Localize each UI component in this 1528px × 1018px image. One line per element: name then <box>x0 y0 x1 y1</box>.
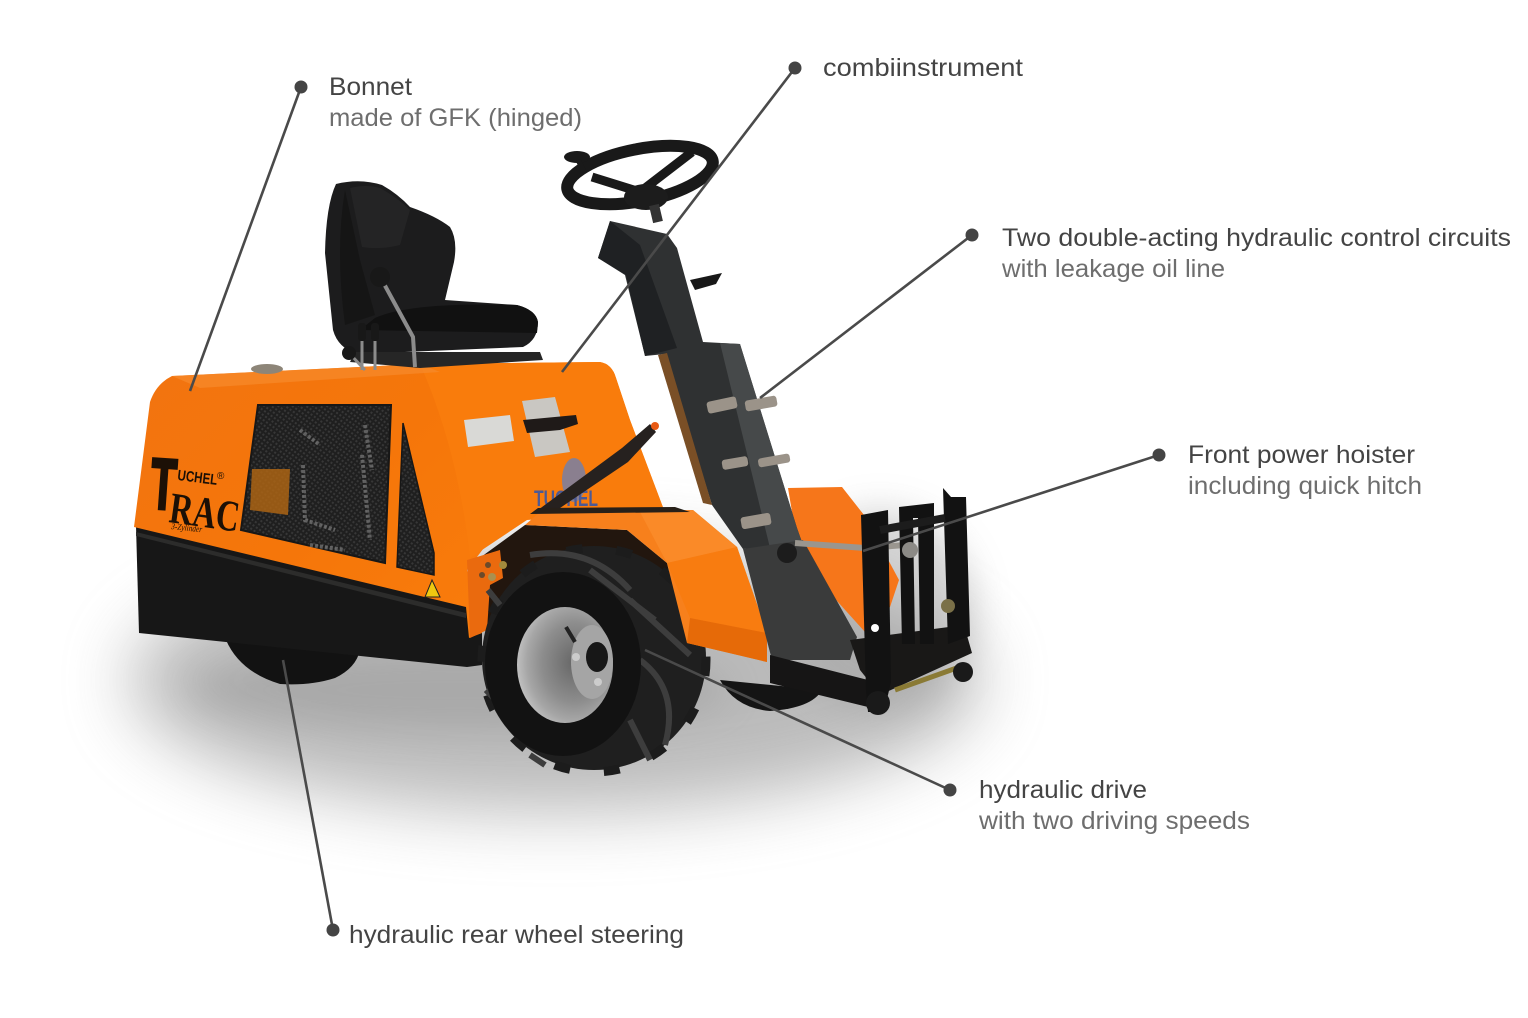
logo: UCHEL <box>177 467 218 489</box>
warning sticker <box>425 580 440 597</box>
main tire <box>482 546 706 772</box>
logo: T <box>148 445 179 526</box>
callout: combiinstrument: combiinstrument <box>823 54 1023 82</box>
front lift frame <box>743 488 973 715</box>
wheel arch <box>470 525 687 720</box>
steering wheel <box>562 135 718 222</box>
callout: bonnet: Bonnet <box>329 73 412 101</box>
callout: hydraulic drive: hydraulic drive <box>979 776 1147 804</box>
steering column <box>598 221 803 549</box>
logo: RAC <box>167 483 243 542</box>
callout: front power hoister: including quick hitch <box>1188 472 1422 500</box>
blue brand mark: TUCHEL <box>534 486 598 511</box>
middle post <box>899 503 934 644</box>
left post <box>861 510 891 712</box>
seat <box>325 181 543 368</box>
type plate <box>464 415 514 447</box>
callout: front power hoister <box>863 441 1422 551</box>
side bracket <box>467 550 507 638</box>
hydraulic couplings <box>706 395 791 530</box>
callout: bonnet: made of GFK (hinged) <box>329 104 582 132</box>
hidden far front wheel <box>720 680 822 711</box>
logo: ® <box>217 471 225 482</box>
logo: 3-Zylinder <box>170 521 203 534</box>
latch handle <box>523 415 578 433</box>
callout: hydraulic control circuits <box>760 224 1511 398</box>
engine parts <box>300 425 372 550</box>
callout: hydraulic rear wheel steering: hydraulic rear wheel steering <box>349 921 684 949</box>
callout: hydraulic drive: with two driving speeds <box>978 807 1250 835</box>
seat levers <box>251 267 415 374</box>
blue brand mark <box>534 458 598 511</box>
callout: hydraulic drive <box>645 650 1250 835</box>
black base <box>136 526 482 667</box>
callout: hydraulic control circuits: with leakage oil line <box>1001 255 1225 283</box>
side mesh vent <box>397 423 434 575</box>
callout: bonnet <box>190 73 582 391</box>
callout: combiinstrument <box>562 54 1023 372</box>
right post <box>943 488 970 644</box>
rear wheel <box>226 640 360 684</box>
oil filter <box>250 469 290 515</box>
engine mesh window <box>241 405 391 563</box>
hand lever <box>538 422 659 510</box>
callout: front power hoister: Front power hoister <box>1188 441 1415 469</box>
callout: hydraulic rear wheel steering <box>283 660 684 949</box>
tractor <box>134 135 973 772</box>
ground shadow <box>130 510 980 812</box>
right orange fender <box>788 487 899 632</box>
callout: hydraulic control circuits: Two double-acting hydraulic control circuits <box>1002 224 1511 252</box>
logo <box>148 445 243 542</box>
front fender <box>525 507 767 662</box>
bonnet body <box>134 362 664 638</box>
latch plate <box>522 397 570 457</box>
